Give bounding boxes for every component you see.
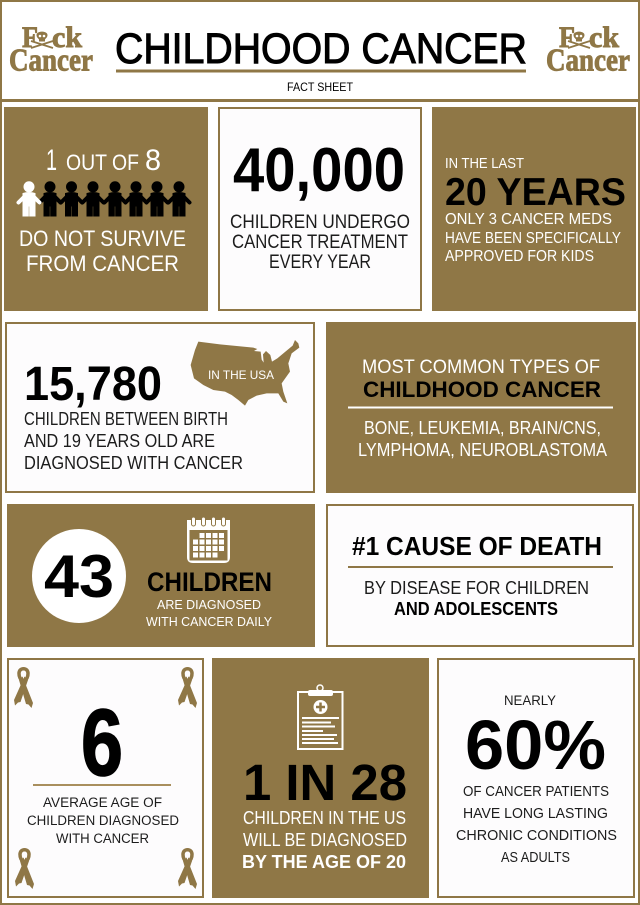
- subtitle: FACT SHEET: [287, 80, 354, 94]
- statistic: 1 out of 8: [46, 144, 161, 177]
- logo: right: ck: [589, 21, 619, 54]
- logo: right: F: [559, 21, 575, 54]
- icon: USA map: [191, 340, 299, 406]
- text: diagnosed: DIAGNOSED WITH CANCER: [24, 453, 243, 473]
- logo: left: [9, 21, 93, 78]
- heading: childhood cancer: CHILDHOOD CANCER: [363, 377, 601, 402]
- text: do not survive: DO NOT SURVIVE: [19, 226, 186, 251]
- text: most common types of: MOST COMMON TYPES OF: [362, 357, 600, 378]
- panel: average age: [8, 659, 203, 897]
- text: average age: AVERAGE AGE OF: [43, 795, 162, 810]
- panel: 20 years: [432, 107, 636, 311]
- text: average age: WITH CANCER: [56, 831, 149, 846]
- icon: clipboard: [298, 685, 342, 749]
- statistic: 40,000: 40,000: [233, 136, 405, 205]
- statistic: 20 years: 20 YEARS: [445, 171, 626, 214]
- panel: 1 in 28: [212, 658, 429, 898]
- text: will be diagnosed: [242, 808, 407, 872]
- text: chronic conditions: OF CANCER PATIENTS: [463, 784, 609, 800]
- statistic: 1 out of 8: OUT OF: [66, 150, 139, 175]
- statistic: 1 out of 8: 1: [46, 144, 57, 177]
- statistic: 15,780: 15,780: [24, 358, 162, 411]
- logo: left: F: [22, 21, 38, 54]
- text: treatment: EVERY YEAR: [269, 252, 371, 273]
- panel: 15,780 children: [6, 323, 314, 492]
- text: chronic conditions: [456, 784, 617, 866]
- text: diagnosed daily: ARE DIAGNOSED: [157, 598, 261, 612]
- text: do not survive: [19, 226, 186, 276]
- logo: left: ck: [52, 21, 82, 54]
- text: approved meds: APPROVED FOR KIDS: [445, 248, 594, 265]
- text: treatment: CHILDREN UNDERGO: [230, 212, 410, 233]
- text: approved meds: ONLY 3 CANCER MEDS: [445, 211, 612, 228]
- text: by disease: BY DISEASE FOR CHILDREN: [364, 578, 589, 598]
- label: in the USA: IN THE USA: [208, 368, 274, 382]
- text: average age: [27, 795, 179, 846]
- text: approved meds: [445, 211, 621, 265]
- panel: 1 out of 8: [4, 107, 208, 311]
- panel: 43 children: [7, 504, 315, 647]
- heading: children: CHILDREN: [147, 567, 272, 597]
- statistic: 43 in circle: [32, 529, 126, 623]
- title: CHILDHOOD CANCER: [115, 26, 527, 73]
- title underline: [116, 70, 526, 72]
- text: chronic conditions: HAVE LONG LASTING: [463, 806, 608, 822]
- text: average age: CHILDREN DIAGNOSED: [27, 813, 179, 828]
- text: will be diagnosed: WILL BE DIAGNOSED: [243, 830, 407, 850]
- heading: #1 cause of death: #1 CAUSE OF DEATH: [352, 531, 602, 561]
- text: chronic conditions: CHRONIC CONDITIONS: [456, 828, 617, 844]
- text: treatment: CANCER TREATMENT: [232, 232, 408, 253]
- text: diagnosed daily: [146, 598, 273, 629]
- text: diagnosed: AND 19 YEARS OLD ARE: [24, 431, 215, 451]
- header: [9, 21, 630, 94]
- panel: 40,000 children: [219, 108, 421, 310]
- text: cancer types: BONE, LEUKEMIA, BRAIN/CNS,: [364, 418, 601, 438]
- icon: calendar: [187, 517, 230, 563]
- panel: #1 cause of death: [327, 505, 633, 646]
- statistic: 1 in 28: 1 IN 28: [243, 754, 407, 811]
- panel: most common types: [326, 322, 636, 493]
- panel: 60%: [438, 659, 634, 897]
- text: by disease: [364, 578, 589, 619]
- text: diagnosed: [24, 409, 243, 473]
- text: nearly: NEARLY: [504, 692, 557, 708]
- text: by disease: AND ADOLESCENTS: [394, 599, 558, 619]
- text: do not survive: FROM CANCER: [26, 251, 179, 276]
- statistic: 6: 6: [81, 690, 123, 796]
- icon: ribbons: [14, 669, 197, 889]
- text: in the last: IN THE LAST: [445, 155, 524, 172]
- text: diagnosed daily: WITH CANCER DAILY: [146, 615, 273, 629]
- statistic: 43 in circle: 43: [44, 543, 114, 610]
- statistic: 60%: 60%: [465, 706, 606, 784]
- text: cancer types: LYMPHOMA, NEUROBLASTOMA: [358, 440, 607, 460]
- text: will be diagnosed: CHILDREN IN THE US: [243, 808, 406, 828]
- logo: left: Cancer: [9, 42, 93, 78]
- icon: row of eight children: [18, 182, 190, 216]
- text: diagnosed: CHILDREN BETWEEN BIRTH: [24, 409, 228, 429]
- text: chronic conditions: AS ADULTS: [501, 850, 570, 866]
- text: cancer types: [358, 418, 607, 460]
- text: treatment: [230, 212, 410, 273]
- text: will be diagnosed: BY THE AGE OF 20: [242, 852, 406, 872]
- statistic: 1 out of 8: 8: [145, 144, 161, 177]
- logo: right: [546, 21, 630, 78]
